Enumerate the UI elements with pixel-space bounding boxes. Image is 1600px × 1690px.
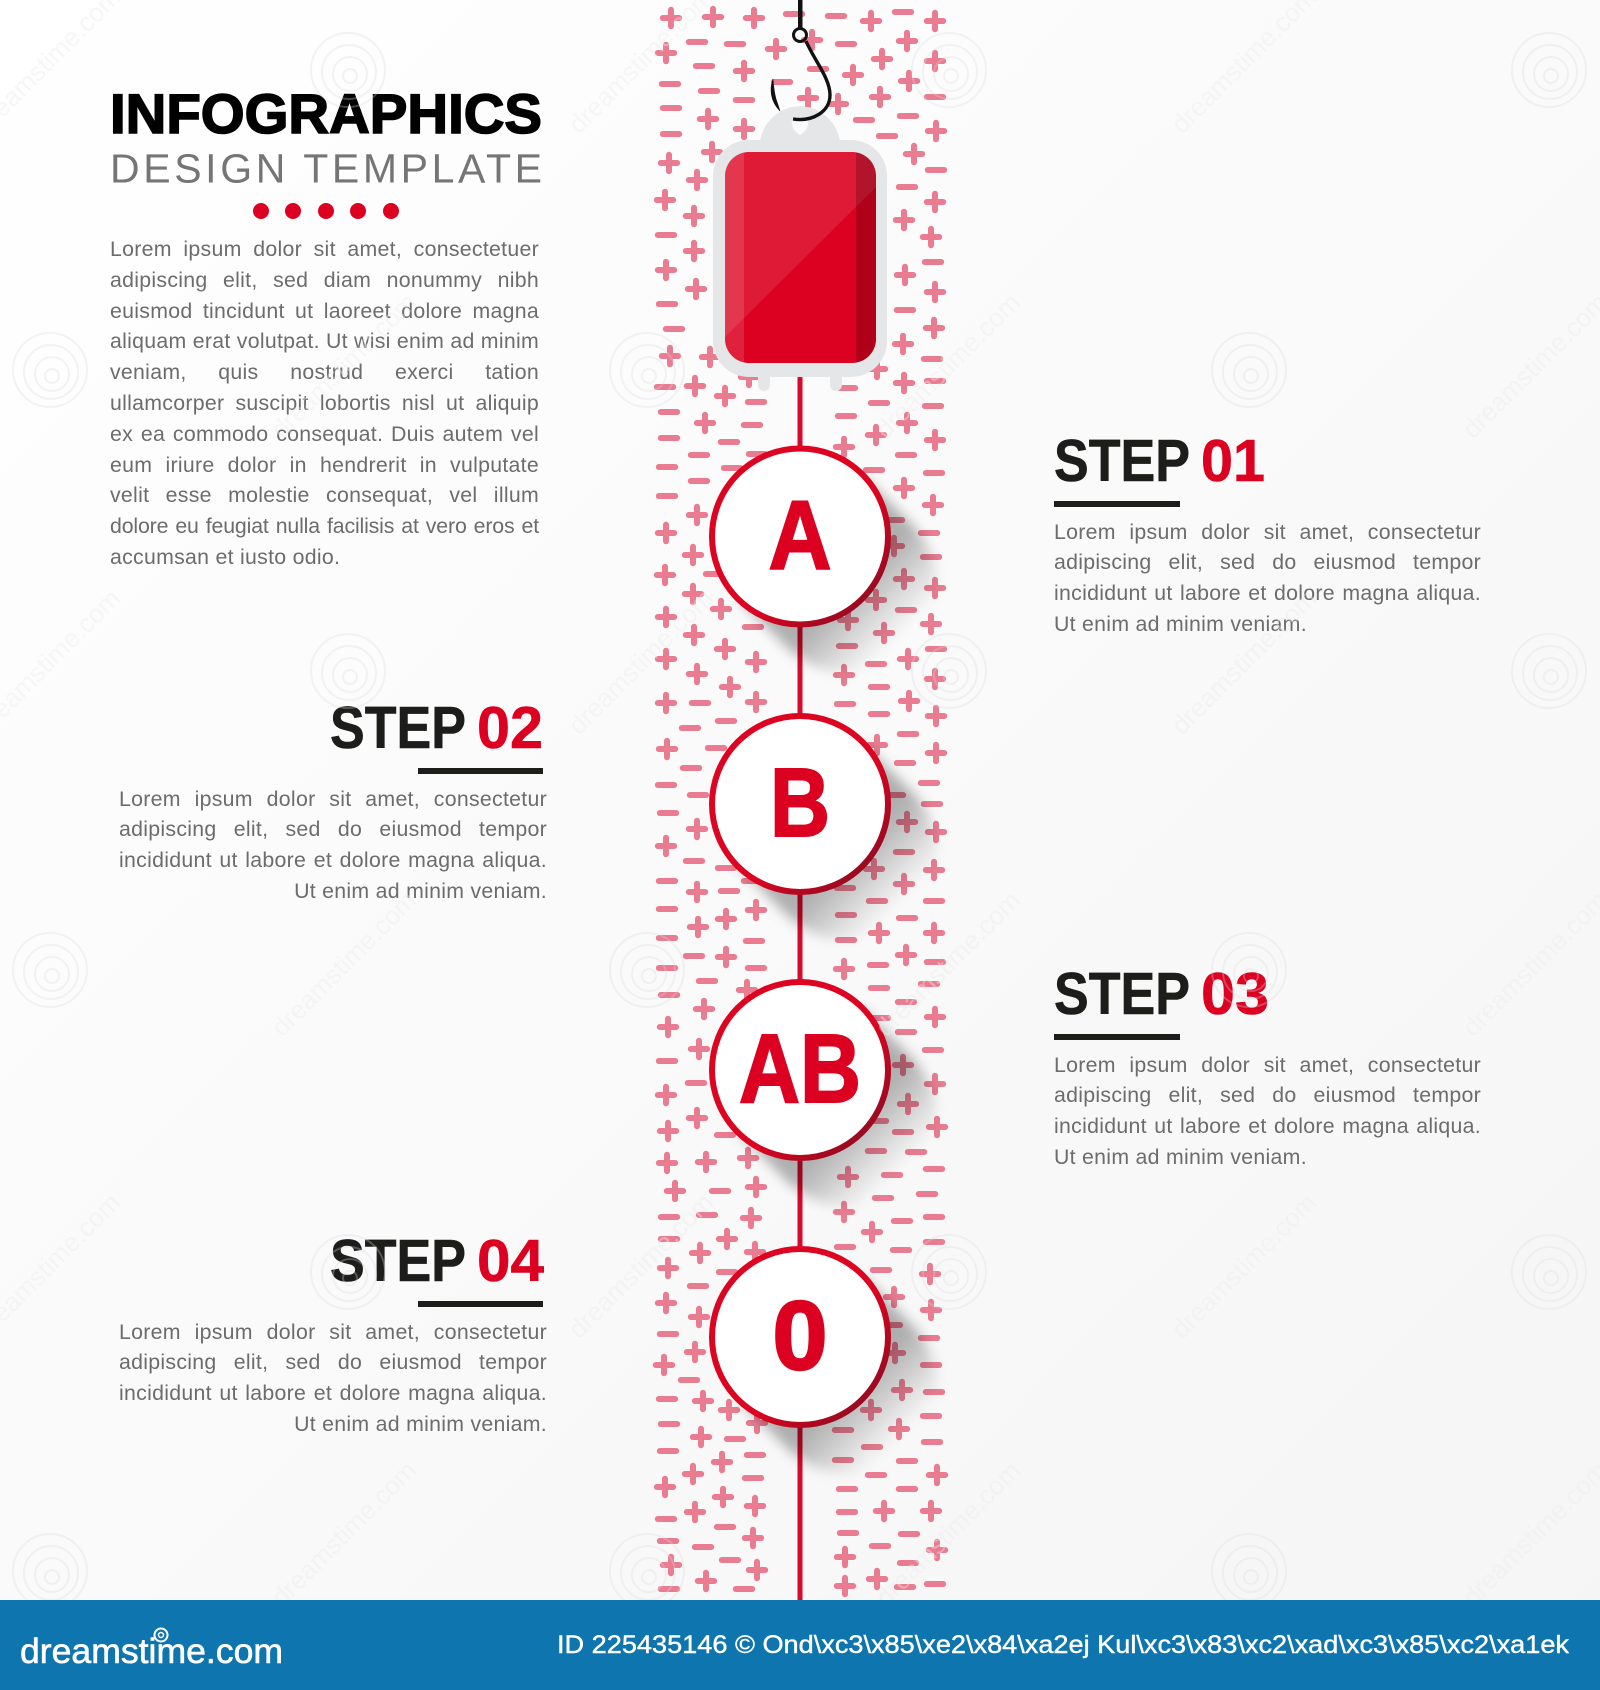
heading: step 04: STEP: [330, 1228, 466, 1294]
intro text block: eum iriure dolor in hendrerit in vulputate: [110, 453, 539, 477]
panel: step 03: [1054, 961, 1481, 1169]
icon: blood bag: [713, 106, 887, 391]
title: [110, 82, 542, 192]
intro text block: ullamcorper suscipit lobortis nisl ut aliquip: [110, 391, 539, 415]
circle: blood type A: [712, 448, 937, 673]
intro text block: aliquam erat volutpat. Ut wisi enim ad minim: [110, 329, 539, 353]
intro text block: veniam, quis nostrud exerci tation: [110, 360, 539, 384]
title: INFOGRAPHICS: [110, 82, 542, 145]
intro text block: euismod tincidunt ut laoreet dolore magna: [110, 299, 539, 323]
panel: step 04: [119, 1228, 547, 1436]
icon: fish hook with rope: [771, 0, 830, 120]
watermark overlay: dreamstime.com: [869, 287, 1026, 444]
step 01 text: adipiscing elit, sed do eiusmod tempor: [1054, 550, 1481, 574]
step 02 text: adipiscing elit, sed do eiusmod tempor: [119, 817, 547, 841]
step 03 text: [1054, 1052, 1481, 1169]
underline: [418, 1301, 543, 1307]
step 02 text: incididunt ut labore et dolore magna aliqua.: [119, 848, 547, 872]
step 02 text: Ut enim ad minim veniam.: [294, 879, 547, 903]
circle: blood type A: A: [768, 480, 832, 590]
watermark overlay: dreamstime.com: [562, 1187, 719, 1344]
title: DESIGN TEMPLATE: [110, 146, 542, 192]
underline: [1054, 1034, 1180, 1040]
step 01 text: Ut enim ad minim veniam.: [1054, 612, 1307, 636]
intro text block: velit esse molestie consequat, vel illum: [110, 483, 539, 507]
plus and minus pattern: [656, 9, 945, 1594]
vertical blood tube line: [798, 360, 802, 1602]
watermark overlay: dreamstime.com: [869, 1455, 1026, 1612]
step 04 text: [119, 1320, 547, 1436]
circle: blood type O: 0: [772, 1281, 828, 1390]
step 03 text: Ut enim ad minim veniam.: [1054, 1145, 1307, 1169]
step 01 text: [1054, 520, 1481, 636]
watermark overlay: dreamstime.com: [265, 287, 422, 444]
panel: step 01: [1054, 428, 1481, 636]
watermark overlay: dreamstime.com: [265, 1455, 422, 1612]
step 01 text: incididunt ut labore et dolore magna aliqua.: [1054, 581, 1481, 605]
central blood bag chart: [652, 0, 948, 1600]
circle: blood type AB: AB: [739, 1014, 861, 1123]
step 03 text: incididunt ut labore et dolore magna aliqua.: [1054, 1114, 1481, 1138]
heading: step 02: 02: [477, 695, 543, 761]
heading: step 04: 04: [477, 1228, 544, 1294]
decorative red dots: [253, 203, 399, 219]
intro text block: [110, 237, 539, 569]
watermark overlay: dreamstime.com: [265, 885, 422, 1042]
underline: [418, 768, 543, 774]
footer bar: [0, 1600, 1600, 1690]
step 03 text: adipiscing elit, sed do eiusmod tempor: [1054, 1083, 1481, 1107]
intro text block: accumsan et iusto odio.: [110, 545, 340, 569]
intro text block: Lorem ipsum dolor sit amet, consectetuer: [110, 237, 539, 261]
heading: step 03: 03: [1201, 961, 1269, 1027]
heading: step 02: STEP: [330, 695, 466, 761]
heading: step 01: STEP: [1054, 428, 1190, 494]
circle: blood type B: [712, 716, 937, 941]
watermark overlay: dreamstime.com: [562, 583, 719, 740]
circle: blood type AB: [712, 982, 937, 1207]
header panel: [110, 82, 542, 569]
heading: step 03: STEP: [1054, 961, 1190, 1027]
intro text block: adipiscing elit, sed diam nonummy nibh: [110, 268, 539, 292]
watermark overlay: dreamstime.com: [1165, 1187, 1322, 1344]
footer logo and id: ID 225435146 © Ond\xc3\x85\xe2\x84\xa2ej Kul\xc3\x83\xc2\xad\xc3\x85\xc2\xa1ek: [557, 1632, 1570, 1659]
footer logo and id: [20, 1628, 1570, 1671]
circle: blood type O: [712, 1249, 937, 1474]
step 02 text: [119, 786, 547, 903]
intro text block: dolore eu feugiat nulla facilisis at vero eros et: [110, 514, 539, 538]
step 02 text: Lorem ipsum dolor sit amet, consectetur: [119, 786, 547, 810]
watermark overlay: dreamstime.com: [1165, 583, 1322, 740]
step 04 text: Ut enim ad minim veniam.: [294, 1412, 547, 1436]
step 04 text: Lorem ipsum dolor sit amet, consectetur: [119, 1320, 547, 1344]
step 04 text: incididunt ut labore et dolore magna aliqua.: [119, 1381, 547, 1405]
step 01 text: Lorem ipsum dolor sit amet, consectetur: [1054, 520, 1481, 544]
intro text block: ex ea commodo consequat. Duis autem vel: [110, 422, 539, 446]
underline: [1054, 501, 1180, 507]
circle: blood type B: B: [770, 748, 830, 857]
panel: step 02: [119, 695, 547, 903]
step 03 text: Lorem ipsum dolor sit amet, consectetur: [1054, 1052, 1481, 1076]
footer logo and id: dreamstime.com: [20, 1632, 283, 1671]
step 04 text: adipiscing elit, sed do eiusmod tempor: [119, 1350, 547, 1374]
watermark overlay: dreamstime.com: [869, 885, 1026, 1042]
heading: step 01: 01: [1201, 428, 1265, 494]
